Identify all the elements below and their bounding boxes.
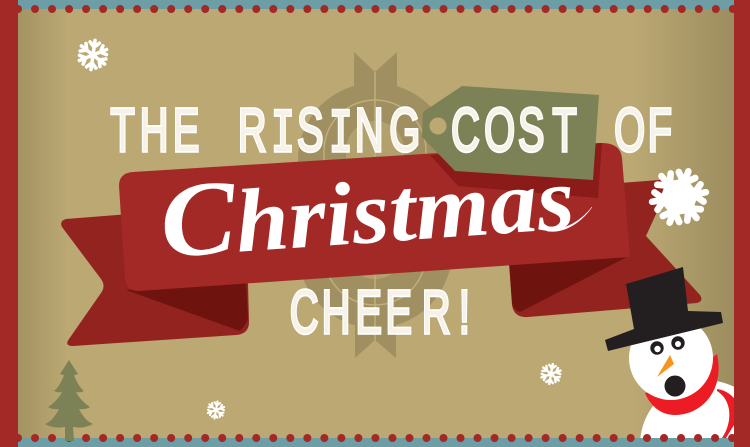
snowflake: small bottom — [206, 400, 226, 420]
mouth — [664, 376, 686, 396]
left red border — [0, 0, 18, 447]
title: Christmas script: Christmas — [156, 134, 578, 280]
bottom dots over snowman — [647, 434, 734, 442]
right eye — [671, 336, 685, 350]
snowflake: top left — [76, 38, 110, 72]
snowman body — [640, 380, 734, 438]
scarf tail — [717, 389, 734, 438]
right red border — [734, 0, 750, 447]
emblem: dollar sign watermark — [298, 52, 452, 358]
ribbon: main band — [119, 143, 630, 291]
top hat — [605, 267, 723, 351]
title: The Rising Cost of: THE RISING COST OF — [111, 95, 672, 170]
top teal strip — [0, 0, 750, 9]
head — [629, 316, 713, 400]
title: Cheer!: CHEER! — [290, 277, 470, 346]
price tag — [422, 86, 599, 180]
left eye — [650, 341, 664, 355]
tag shadow — [430, 143, 602, 198]
ribbon: right tail — [509, 179, 701, 317]
bottom strip over snowman — [640, 438, 734, 447]
snowflake: small lower right — [539, 362, 563, 386]
bottom teal strip — [0, 438, 750, 447]
scarf — [645, 354, 719, 415]
snowflake: large right — [643, 162, 715, 232]
ribbon: left tail — [61, 214, 249, 346]
icon: christmas tree — [45, 360, 93, 441]
carrot nose — [657, 355, 674, 377]
snowman — [605, 267, 734, 438]
